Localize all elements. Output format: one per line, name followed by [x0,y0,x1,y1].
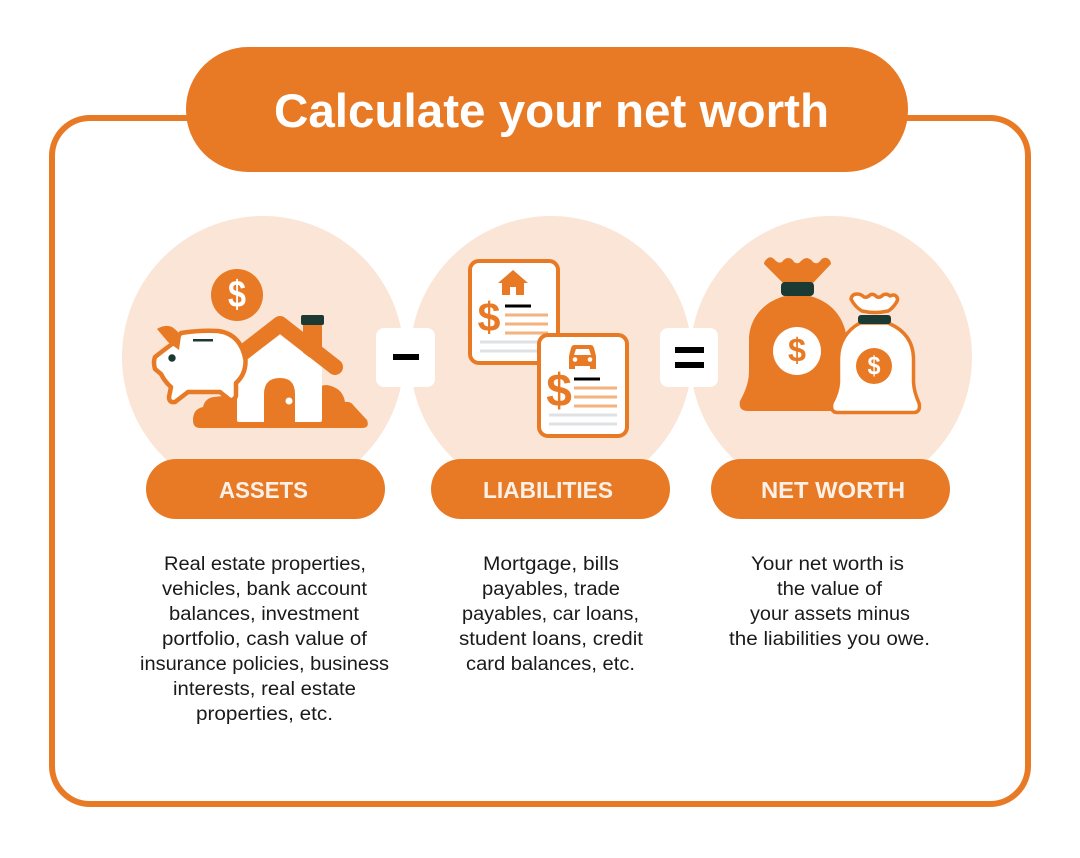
text block: liabilities description: payables, car loans, [462,604,639,625]
icon: car loan document: $ [546,364,572,416]
text block: assets description [140,554,389,725]
text block: net worth description: your assets minus [750,604,910,625]
background circle: assets [122,216,404,498]
icon: small house [498,270,528,295]
icon: mortgage document: $ [478,294,501,340]
text block: liabilities description: Mortgage, bills [483,554,619,575]
outer frame panel [52,118,1028,804]
icon: dollar coin [211,269,263,321]
title banner: Calculate your net worth [274,84,829,137]
text block: liabilities description: student loans, credit [459,629,644,650]
icon: small money bag [832,294,919,412]
text block: net worth description: the value of [777,579,883,600]
label pill: liabilities [431,459,670,519]
icon: large money bag [740,257,847,411]
icon: car [569,345,596,369]
title banner [186,47,908,172]
label pill: net worth [711,459,950,519]
icon: piggy bank, house and coin [154,269,368,428]
text block: assets description: balances, investment [169,604,360,625]
label pill: assets: ASSETS [219,477,308,503]
text block: assets description: portfolio, cash value of [162,629,368,650]
text block: liabilities description: payables, trade [482,579,620,600]
text block: liabilities description [459,554,644,675]
text block: liabilities description: card balances, etc. [466,654,635,675]
text block: assets description: vehicles, bank account [162,579,368,600]
icon: bushes [193,385,368,428]
text block: net worth description: the liabilities you owe. [729,629,930,650]
label pill: assets [146,459,385,519]
label pill: net worth: NET WORTH [761,477,905,503]
background circle: net worth [690,216,972,498]
text block: net worth description [729,554,930,650]
icon: house [237,315,335,422]
text block: net worth description: Your net worth is [751,554,904,575]
background circle: liabilities [410,216,692,498]
icon: large money bag: $ [788,332,806,368]
icon: mortgage document [470,261,558,363]
icon: small money bag: $ [868,350,881,380]
text block: assets description: Real estate properties, [164,554,366,575]
icon: car loan document [539,335,627,436]
text block: assets description: interests, real estate [173,679,356,700]
minus sign [376,328,435,387]
text block: assets description: properties, etc. [196,704,333,725]
equals sign [660,328,718,387]
label pill: liabilities: LIABILITIES [483,477,613,503]
icon: piggy bank [154,326,246,402]
text block: assets description: insurance policies, business [140,654,389,675]
icon: dollar coin: $ [228,274,246,316]
